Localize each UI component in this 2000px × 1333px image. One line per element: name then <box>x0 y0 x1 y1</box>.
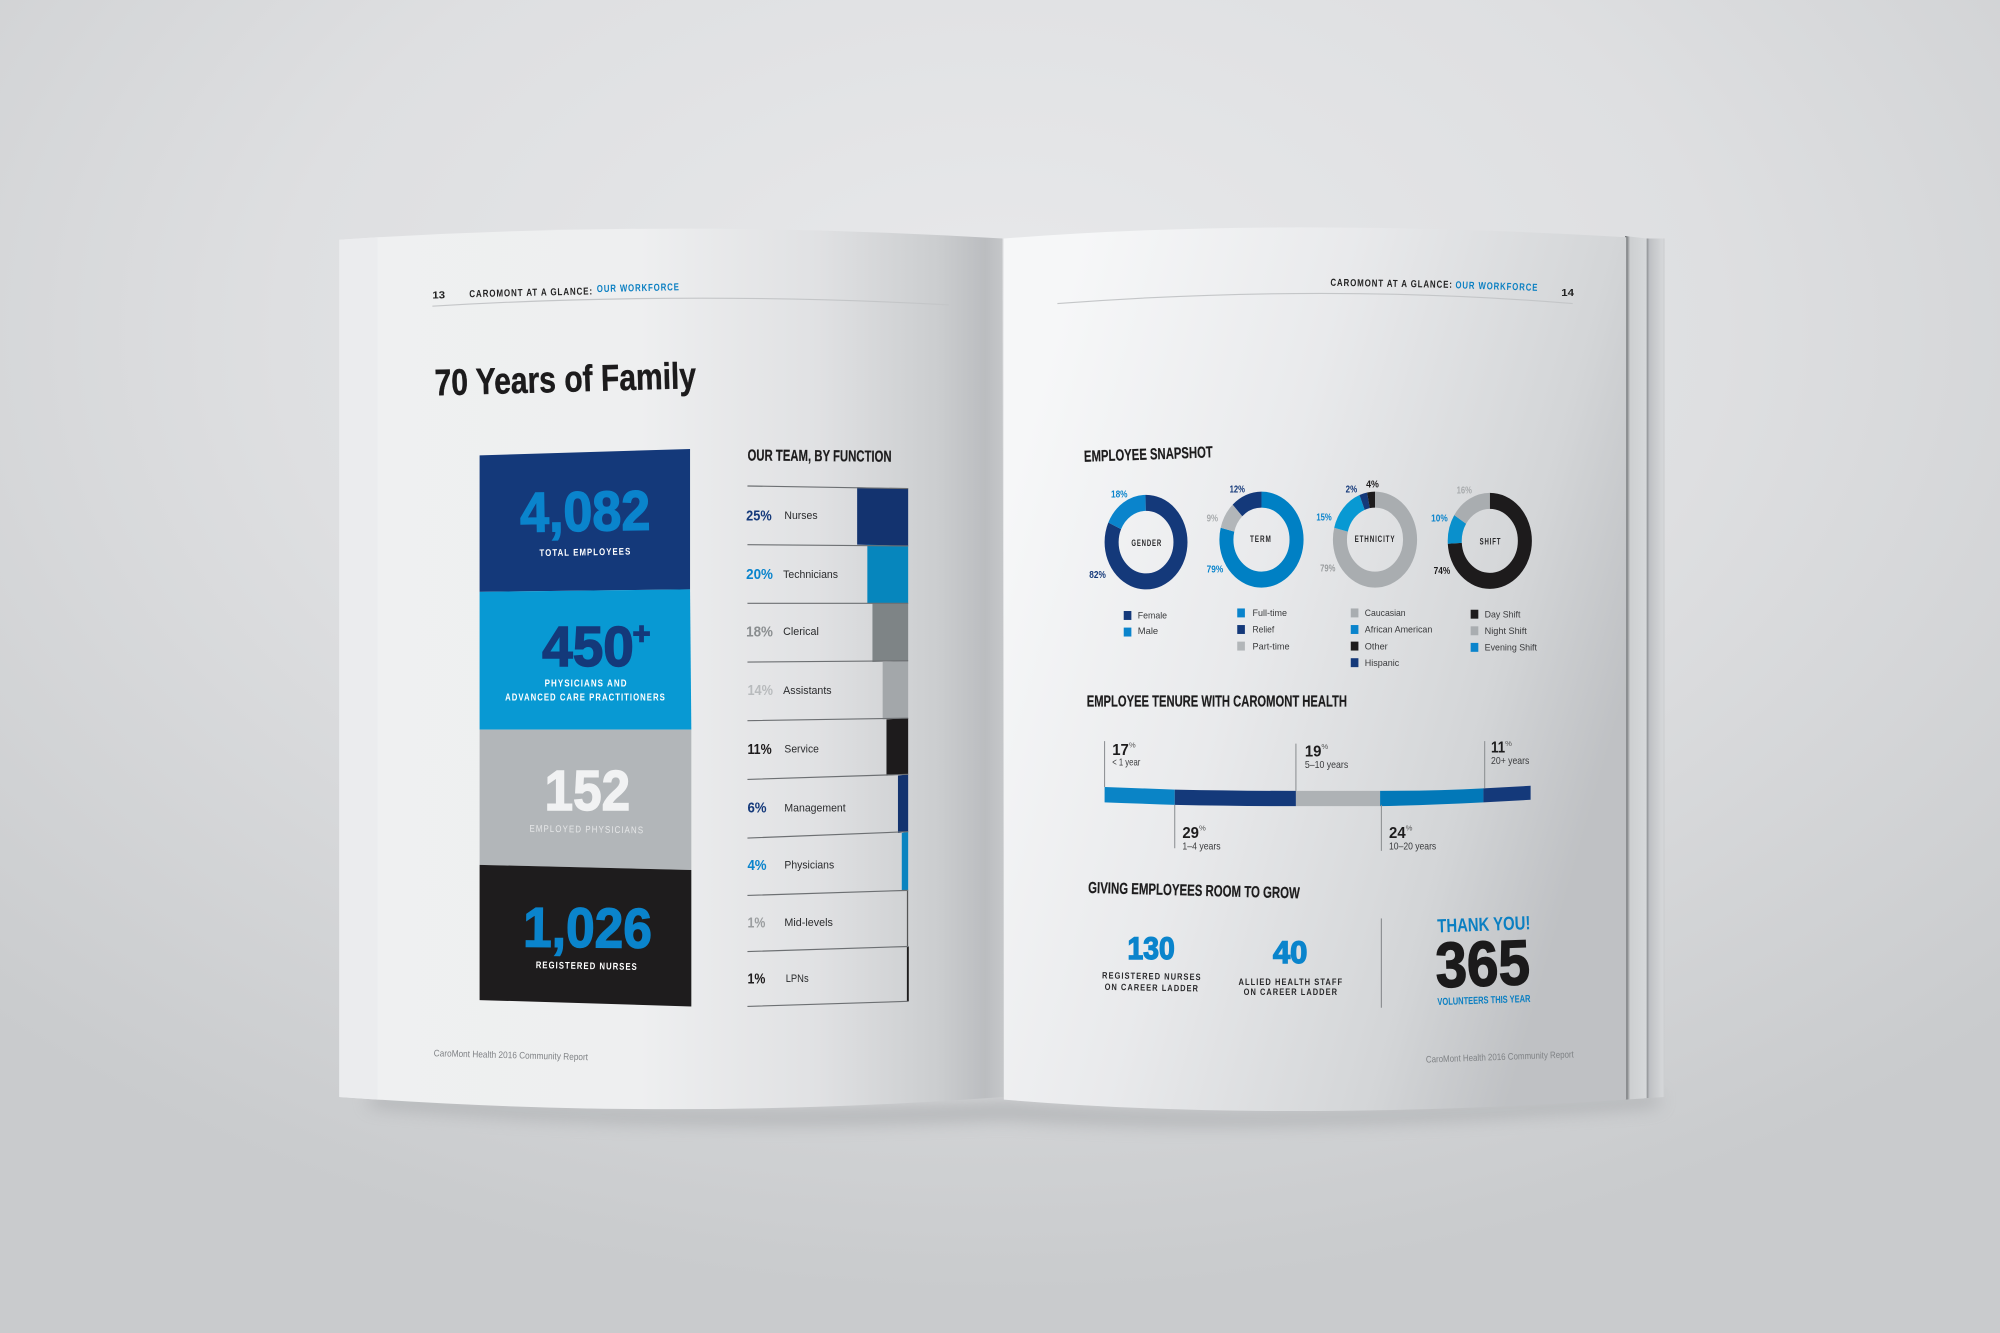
chart: term donut: Full-time <box>1253 607 1287 618</box>
row: assistants: 14% <box>747 683 773 699</box>
tenure label: 5-10 years <box>1305 742 1348 771</box>
tenure label: 1-4 years: 29 <box>1182 825 1199 842</box>
chart: gender donut: Male <box>1138 625 1158 636</box>
heading: employee tenure: EMPLOYEE TENURE WITH CAROMONT HEALTH <box>1087 694 1347 711</box>
stat: employed physicians <box>480 730 691 870</box>
chart: term donut: Relief <box>1253 624 1275 635</box>
row divider lines <box>747 486 908 1006</box>
chart: shift donut: Evening Shift <box>1485 642 1537 653</box>
row: management: 6% <box>747 801 767 817</box>
chart: term donut <box>1207 484 1297 651</box>
stat: physicians and practitioners: 450 <box>542 615 634 678</box>
row: nurses: 25% <box>746 508 772 524</box>
tenure label: 5-10 years: % <box>1321 742 1328 751</box>
row: clerical: 18% <box>746 625 773 641</box>
stat: employed physicians: 152 <box>545 759 630 822</box>
chart: ethnicity donut <box>1316 479 1432 668</box>
tenure label: 20+ years: 20+ years <box>1491 756 1529 767</box>
page header right: CAROMONT AT A GLANCE: <box>1330 278 1453 291</box>
chart: shift donut: SHIFT <box>1480 537 1501 547</box>
tenure label: 1-4 years: 1–4 years <box>1182 842 1221 853</box>
panel: stacked statistics column <box>480 449 691 1006</box>
stat: registered nurses on career ladder: 130 <box>1128 930 1175 966</box>
page header right: OUR WORKFORCE <box>1455 280 1538 294</box>
chart: shift donut: 74% <box>1434 566 1451 577</box>
tenure label: 20+ years: 11 <box>1491 740 1505 757</box>
chart: gender donut: GENDER <box>1131 538 1162 548</box>
stat: allied health staff on career ladder: ON CAREER LADDER <box>1244 987 1338 997</box>
stat: total employees: TOTAL EMPLOYEES <box>539 547 631 559</box>
row: mid-levels: 1% <box>747 915 765 931</box>
chart: tenure bar <box>1105 739 1531 853</box>
callout: volunteers thank you: 365 <box>1434 926 1531 1001</box>
row: mid-levels: Mid-levels <box>784 917 833 929</box>
stat: total employees <box>480 449 690 592</box>
row: physicians <box>747 858 835 874</box>
row: assistants: Assistants <box>783 685 832 697</box>
panel: left page <box>339 229 1004 1109</box>
chart: ethnicity donut: 4% <box>1366 479 1379 490</box>
stat: allied health staff on career ladder <box>1239 934 1343 997</box>
chart: ethnicity donut: 15% <box>1316 512 1332 523</box>
stat: physicians and practitioners: ADVANCED CARE PRACTITIONERS <box>505 692 666 703</box>
chart: ethnicity donut: 2% <box>1346 484 1357 495</box>
tenure label: 5-10 years: 5–10 years <box>1305 760 1348 771</box>
stat: allied health staff on career ladder: 40 <box>1273 934 1307 970</box>
page header left <box>432 282 949 306</box>
row: technicians: Technicians <box>783 569 839 581</box>
tenure label: 1-4 years: % <box>1199 823 1206 832</box>
tenure label: 1-4 years <box>1182 823 1221 853</box>
chart: shift donut: 16% <box>1457 486 1472 497</box>
chart: term donut: 9% <box>1207 514 1218 525</box>
page header left: CAROMONT AT A GLANCE: <box>469 286 593 300</box>
tenure label: under 1 year: < 1 year <box>1112 757 1141 768</box>
tenure label: 10-20 years: 24 <box>1389 825 1406 842</box>
stat: physicians and practitioners <box>480 589 691 730</box>
stat: total employees: 4,082 <box>520 479 651 544</box>
page header right <box>1057 278 1574 304</box>
stat: employed physicians: EMPLOYED PHYSICIANS <box>529 824 644 836</box>
tenure label: under 1 year: 17 <box>1112 742 1129 759</box>
stat: physicians and practitioners: PHYSICIANS AND <box>545 678 628 689</box>
chart: term donut: 12% <box>1230 484 1245 495</box>
row: nurses: Nurses <box>784 510 818 522</box>
footer left: CaroMont Health 2016 Community Report <box>434 1047 589 1062</box>
row: service <box>747 742 819 758</box>
page header left: 13 <box>432 290 446 301</box>
chart: shift donut <box>1431 486 1537 653</box>
chart: term donut: 79% <box>1207 565 1224 576</box>
row: clerical <box>746 625 819 641</box>
row: physicians: Physicians <box>784 860 835 872</box>
row: technicians: 20% <box>746 567 773 583</box>
stat: registered nurses on career ladder: ON CAREER LADDER <box>1105 982 1199 994</box>
row: lpns: 1% <box>747 971 765 987</box>
tenure label: 10-20 years: % <box>1406 823 1413 832</box>
tenure label: 20+ years <box>1491 739 1529 767</box>
row: service: Service <box>784 744 819 756</box>
heading: giving employees room to grow: GIVING EMPLOYEES ROOM TO GROW <box>1088 880 1301 902</box>
stat: allied health staff on career ladder: ALLIED HEALTH STAFF <box>1239 977 1343 987</box>
tenure label: 10-20 years: 10–20 years <box>1389 842 1436 853</box>
title: 70 Years of Family <box>434 355 697 403</box>
stat: registered nurses: REGISTERED NURSES <box>536 960 638 973</box>
page header left: OUR WORKFORCE <box>597 282 680 295</box>
row: nurses <box>746 508 818 524</box>
chart: term donut: Part-time <box>1253 640 1290 651</box>
stat: registered nurses on career ladder: REGISTERED NURSES <box>1102 970 1202 982</box>
chart: ethnicity donut: 79% <box>1320 563 1336 574</box>
stat: registered nurses: 1,026 <box>523 895 652 960</box>
page header right: 14 <box>1561 288 1574 299</box>
row: assistants <box>747 683 832 699</box>
chart: team by function bars <box>746 486 909 1006</box>
chart: shift donut: 10% <box>1431 514 1448 525</box>
tenure label: under 1 year <box>1112 741 1141 768</box>
chart: ethnicity donut: Hispanic <box>1365 657 1400 668</box>
callout: volunteers thank you: VOLUNTEERS THIS YEAR <box>1437 994 1531 1008</box>
row: physicians: 4% <box>747 858 767 874</box>
chart: gender donut <box>1089 489 1180 637</box>
row: management: Management <box>784 802 846 814</box>
chart: ethnicity donut: Other <box>1365 640 1388 651</box>
stacked back pages <box>1625 236 1665 1100</box>
book shadow <box>370 1094 1658 1124</box>
chart: gender donut: Female <box>1138 610 1167 621</box>
stat: physicians and practitioners: + <box>633 617 651 651</box>
bars <box>857 487 909 1001</box>
heading: employee snapshot: EMPLOYEE SNAPSHOT <box>1084 444 1213 466</box>
chart: shift donut: Day Shift <box>1485 608 1521 619</box>
row: lpns: LPNs <box>786 973 809 985</box>
chart: gender donut: 18% <box>1111 489 1128 500</box>
panel: right page <box>1004 227 1626 1111</box>
tenure label: under 1 year: % <box>1129 741 1136 750</box>
chart: shift donut: Night Shift <box>1485 625 1527 636</box>
chart: ethnicity donut: Caucasian <box>1365 607 1406 618</box>
chart: gender donut: 82% <box>1089 570 1106 581</box>
footer right: CaroMont Health 2016 Community Report <box>1426 1048 1574 1065</box>
tenure label: 5-10 years: 19 <box>1305 743 1322 760</box>
tenure label: 20+ years: % <box>1505 739 1512 748</box>
row: mid-levels <box>747 915 833 931</box>
chart: term donut: TERM <box>1250 534 1272 544</box>
stat: registered nurses <box>480 865 691 1006</box>
row: clerical: Clerical <box>783 626 819 638</box>
chart: ethnicity donut: ETHNICITY <box>1355 534 1395 544</box>
stat: registered nurses on career ladder <box>1102 930 1202 994</box>
callout: volunteers thank you: THANK YOU! <box>1437 913 1531 937</box>
row: technicians <box>746 567 839 583</box>
row: lpns <box>747 971 809 987</box>
row: service: 11% <box>747 742 772 758</box>
heading: our team by function: OUR TEAM, BY FUNCTION <box>747 447 892 466</box>
tenure label: 10-20 years <box>1389 823 1436 853</box>
chart: ethnicity donut: African American <box>1365 624 1432 635</box>
row: management <box>747 801 846 817</box>
